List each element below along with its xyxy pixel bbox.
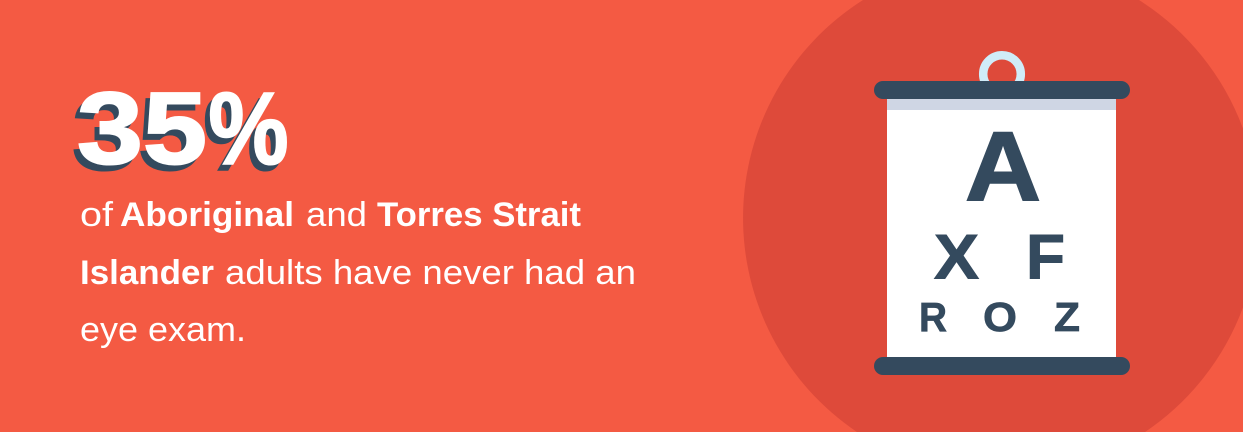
statistic: 35%: % [204, 78, 284, 192]
description text [80, 196, 636, 349]
top roller [874, 81, 1130, 99]
chart letters: F [1026, 222, 1065, 292]
description text: Aboriginal [120, 196, 294, 234]
description text: eye exam. [80, 311, 246, 349]
description text: Torres Strait [377, 196, 581, 234]
description text: adults have never had an [225, 254, 636, 292]
chart letters: R [919, 294, 947, 340]
chart letters: A [965, 112, 1041, 222]
description text: and [306, 196, 367, 234]
statistic: 35%: 3 [72, 78, 138, 192]
chart letters: Z [1054, 294, 1080, 340]
chart letters: O [983, 294, 1017, 340]
chart letters [919, 112, 1080, 340]
statistic: 35% [72, 72, 288, 192]
description text: Islander [80, 254, 214, 292]
background circle [743, 0, 1243, 432]
chart letters: X [934, 222, 979, 292]
statistic: 35%: 3 [77, 72, 143, 186]
statistic: 35%: 5 [138, 78, 202, 192]
description text: of [80, 196, 114, 234]
icon: eye chart [874, 55, 1130, 375]
sheet shadow strip [887, 98, 1116, 110]
statistic: 35%: % [208, 72, 288, 186]
bottom roller [874, 357, 1130, 375]
hanging ring [983, 55, 1021, 93]
chart sheet [887, 98, 1116, 360]
statistic: 35%: 5 [143, 72, 207, 186]
